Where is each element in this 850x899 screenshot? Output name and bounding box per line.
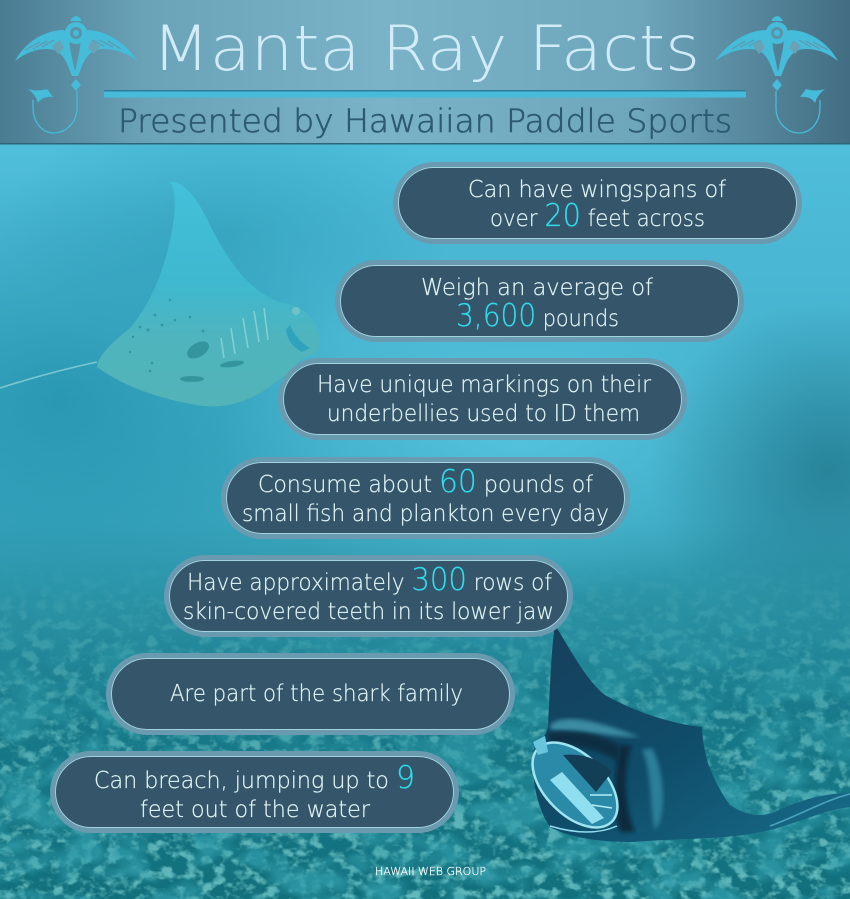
fact pill 3: markings [280, 360, 684, 438]
fact pill 6: shark family: Are part of the shark family [170, 681, 463, 707]
fact pill 3: markings: underbellies used to ID them [327, 401, 640, 427]
fact pill 2: weight [338, 262, 742, 340]
illustration: dark manta ray lower right [517, 625, 850, 843]
fact pill 3: markings: Have unique markings on their [317, 372, 651, 398]
fact pill 1: wingspans: Can have wingspans of [468, 177, 727, 203]
subtitle: Presented by Hawaiian Paddle Sports [118, 102, 732, 140]
footer credit: HAWAII WEB GROUP [375, 865, 486, 878]
fact pill 2: weight: Weigh an average of [421, 275, 654, 301]
fact pill 7: breach [52, 754, 456, 830]
fact pill 4: diet: Consume about 60 pounds of [258, 464, 594, 500]
fact pill 4: diet: small fish and plankton every day [242, 501, 609, 527]
fact pill 5: teeth [166, 558, 570, 634]
fact pill 7: breach: Can breach, jumping up to 9 [94, 760, 415, 796]
fact pill 6: shark family [108, 656, 512, 732]
fact pill 5: teeth: Have approximately 300 rows of [187, 562, 553, 598]
fact pill 1: wingspans [396, 164, 800, 242]
fact pill 5: teeth: skin-covered teeth in its lower jaw [183, 599, 554, 625]
title rule [104, 90, 746, 98]
fact pill 1: wingspans: over 20 feet across [490, 198, 705, 234]
fact pill 7: breach: feet out of the water [140, 797, 371, 823]
fact pill 2: weight: 3,600 pounds [456, 298, 619, 334]
icon: left tribal manta emblem [15, 16, 138, 133]
icon: right tribal manta emblem [715, 16, 838, 133]
title: Manta Ray Facts [152, 12, 700, 85]
fact pill 4: diet [224, 460, 628, 536]
illustration: pale manta ray upper left [0, 182, 319, 406]
header banner [0, 0, 850, 144]
